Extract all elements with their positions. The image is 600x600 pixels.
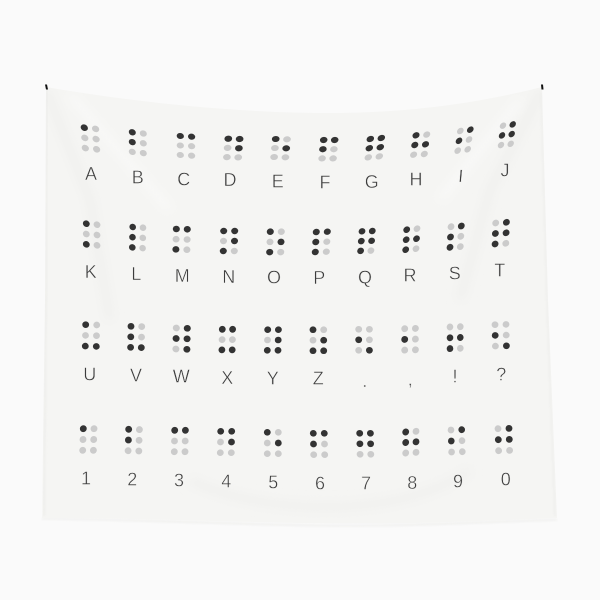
braille cell: O: O — [267, 267, 281, 287]
braille cell: R: R — [404, 265, 416, 285]
braille cell: 6: 6 — [315, 473, 325, 493]
braille cell: T: T — [494, 261, 505, 281]
braille cell: question mark: ? — [496, 364, 506, 384]
right hanging pin — [541, 84, 544, 90]
braille cell: X: X — [221, 368, 233, 388]
braille cell: G: G — [365, 172, 379, 192]
braille cell: 0: 0 — [501, 469, 511, 489]
braille cell: P: P — [313, 268, 325, 288]
braille cell: 1 — [79, 425, 98, 489]
braille cell: B — [129, 129, 147, 187]
braille cell: L — [129, 224, 146, 284]
braille cell: W: W — [173, 367, 190, 387]
braille cell: 7: 7 — [361, 473, 371, 493]
braille cell: comma: , — [408, 369, 413, 389]
tapestry fabric — [42, 87, 557, 524]
braille cell: B: B — [132, 167, 144, 187]
braille cell: 5: 5 — [268, 473, 278, 493]
braille cell: 5 — [264, 429, 282, 493]
braille cell: Q: Q — [358, 267, 372, 287]
braille cell: 2: 2 — [127, 469, 137, 489]
braille cell: O — [266, 228, 285, 287]
braille cell: A — [81, 124, 100, 184]
braille cell: D: D — [224, 170, 236, 190]
braille cell: 6 — [310, 430, 328, 493]
braille cell: Q — [357, 228, 376, 287]
braille cell: N: N — [222, 267, 235, 287]
braille cell: Z — [310, 326, 327, 389]
braille cell: E — [270, 136, 291, 191]
braille cell: F: F — [320, 172, 330, 192]
braille cell: M — [172, 226, 191, 286]
braille cell: H: H — [410, 169, 422, 189]
braille cell: Z: Z — [313, 369, 324, 389]
braille cell: J: J — [500, 161, 510, 181]
tapestry shadow — [42, 518, 557, 526]
braille cell: D — [223, 135, 244, 190]
braille cell: A: A — [85, 164, 97, 184]
braille cell: S — [446, 222, 465, 284]
braille cell: E: E — [272, 171, 284, 191]
braille cell: 4 — [217, 428, 235, 491]
braille cell: Y: Y — [267, 368, 279, 388]
braille cell: X — [218, 326, 236, 388]
braille cell: 9 — [448, 426, 466, 491]
braille cell: U — [82, 321, 100, 385]
braille cell: 9: 9 — [453, 471, 463, 491]
braille cell: G — [364, 135, 385, 192]
braille cell: L: L — [131, 264, 141, 284]
braille cell: Y — [264, 326, 282, 388]
braille cell: exclamation mark — [447, 323, 464, 386]
braille cell: 3: 3 — [174, 470, 184, 490]
braille cell: N — [220, 228, 238, 287]
braille cell: 8: 8 — [407, 473, 417, 493]
braille cell: question mark — [492, 321, 510, 384]
braille cell: period — [355, 326, 373, 391]
braille cell: P — [312, 228, 331, 288]
braille cell: 3 — [171, 427, 189, 490]
braille cell: V: V — [130, 365, 142, 385]
braille cell: C — [177, 133, 195, 189]
braille cell: U: U — [83, 365, 96, 385]
braille cell: H — [410, 131, 431, 189]
braille cell: 0 — [494, 425, 513, 489]
left hanging pin — [45, 84, 48, 90]
braille cell: K: K — [85, 262, 97, 282]
braille cell: I: I — [457, 166, 464, 186]
braille cell: 1: 1 — [81, 469, 91, 489]
braille cell: period: . — [362, 371, 367, 391]
braille cell: 8 — [402, 428, 419, 493]
braille cell: F — [318, 137, 339, 192]
braille cell: K — [83, 220, 100, 282]
braille cell: W — [172, 325, 191, 387]
braille cell: M: M — [175, 266, 190, 286]
braille cell: I — [454, 126, 474, 186]
braille cell: 2 — [125, 426, 143, 489]
braille cell: 4: 4 — [221, 471, 231, 491]
braille cell: S: S — [449, 264, 461, 284]
braille cell: comma — [401, 325, 419, 389]
braille cell: C: C — [177, 169, 190, 189]
braille cell: J — [497, 121, 516, 181]
braille cell: R — [402, 225, 421, 285]
braille cell: T — [492, 219, 510, 281]
braille cell: V — [127, 323, 145, 385]
braille cell: exclamation mark: ! — [452, 366, 458, 386]
braille cell: 7 — [356, 430, 374, 493]
